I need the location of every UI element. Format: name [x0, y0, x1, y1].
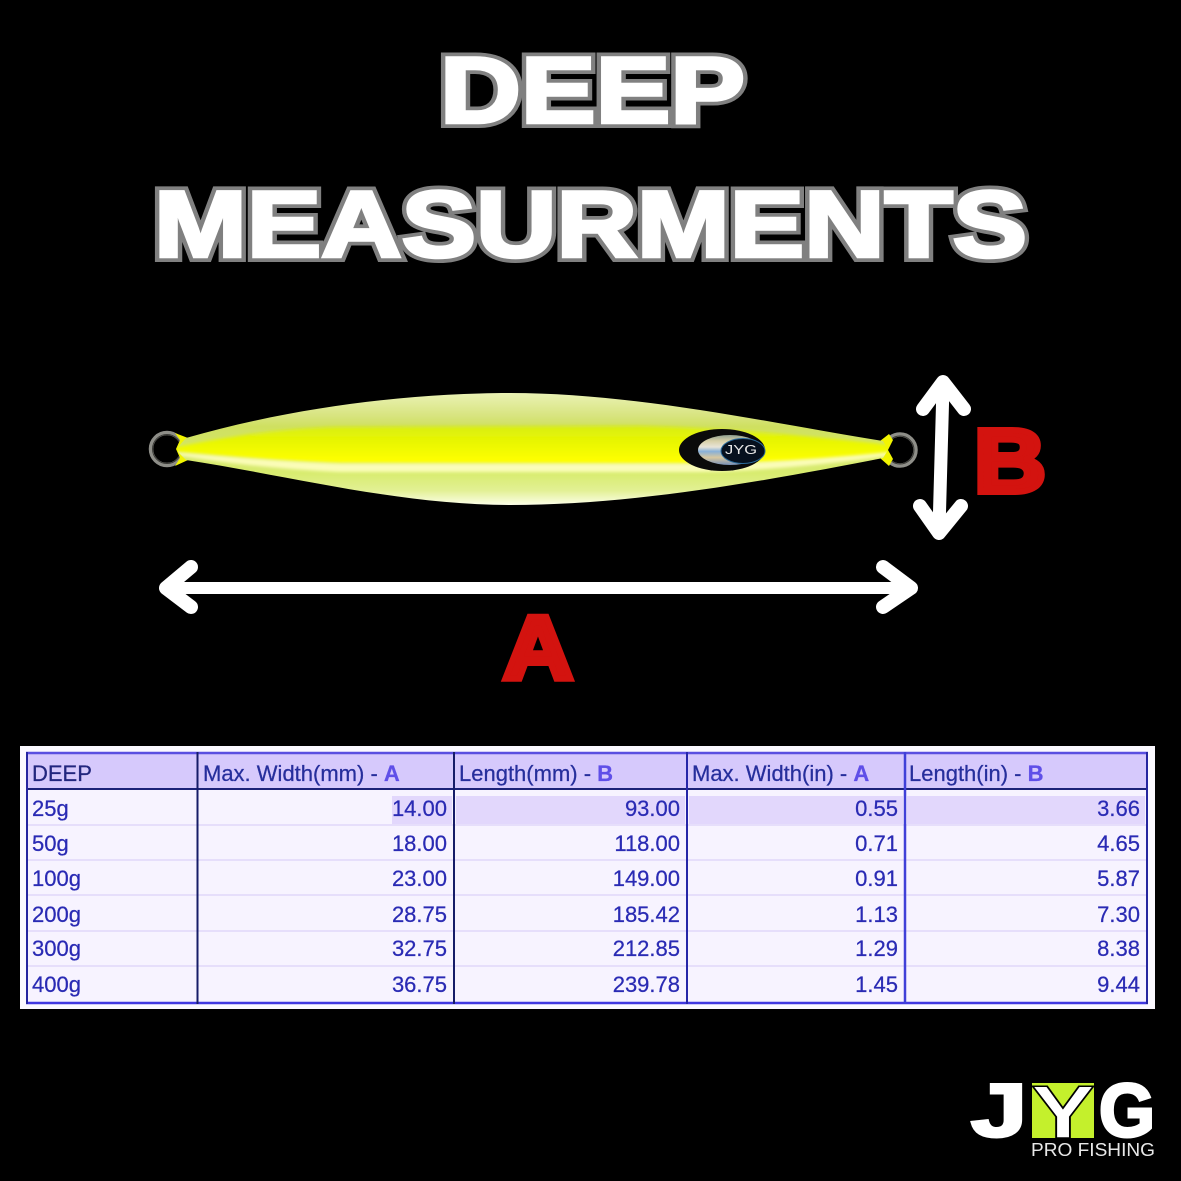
row 25g	[32, 796, 1140, 821]
row 25g: 25g	[32, 796, 69, 821]
row 300g: 1.29	[855, 936, 898, 961]
title line: DEEP: DEEP	[440, 38, 745, 142]
row 100g: 5.87	[1097, 866, 1140, 891]
row 50g: 4.65	[1097, 831, 1140, 856]
row 50g: 0.71	[855, 831, 898, 856]
row 100g: 100g	[32, 866, 81, 891]
table panel background	[20, 746, 1155, 1009]
row 400g	[32, 972, 1140, 997]
row 300g: 32.75	[392, 936, 447, 961]
row 50g	[32, 831, 1140, 856]
row 300g: 212.85	[613, 936, 680, 961]
row 300g: 8.38	[1097, 936, 1140, 961]
row 400g: 9.44	[1097, 972, 1140, 997]
row 200g: 1.13	[855, 902, 898, 927]
row 400g: 400g	[32, 972, 81, 997]
left eyelet	[175, 433, 188, 466]
row 400g: 36.75	[392, 972, 447, 997]
header row: Length(in) - B	[909, 761, 1044, 786]
row 300g: 300g	[32, 936, 81, 961]
title line: DEEP: DEEP	[440, 38, 745, 142]
sticker logo text: JYG	[725, 442, 757, 457]
header row: Max. Width(mm) - A	[203, 761, 400, 786]
header row: Length(mm) - B	[459, 761, 613, 786]
row 200g: 185.42	[613, 902, 680, 927]
row 25g: 0.55	[855, 796, 898, 821]
row 25g: 93.00	[625, 796, 680, 821]
row 50g: 18.00	[392, 831, 447, 856]
row 400g: 239.78	[613, 972, 680, 997]
row 200g: 28.75	[392, 902, 447, 927]
row 50g: 50g	[32, 831, 69, 856]
JYG Pro Fishing logo	[971, 1068, 1155, 1160]
yellow logo square	[1032, 1083, 1094, 1138]
lure body	[178, 393, 888, 505]
row 100g	[32, 866, 1140, 891]
title line: MEASURMENTS: MEASURMENTS	[154, 172, 1027, 276]
row 200g: 200g	[32, 902, 81, 927]
right split ring	[884, 434, 916, 466]
logo wordmark: J	[971, 1068, 1027, 1152]
arrow: vertical dimension B	[920, 382, 964, 533]
holographic eye sticker	[679, 429, 765, 471]
fishing jig lure	[148, 393, 918, 505]
row 300g	[32, 936, 1140, 961]
logo wordmark: Y	[1031, 1070, 1095, 1154]
right eyelet	[880, 434, 893, 466]
arrow: horizontal dimension A	[166, 567, 911, 607]
logo tagline: PRO FISHING	[1031, 1140, 1155, 1160]
row 50g: 118.00	[614, 831, 680, 856]
title line: MEASURMENTS: MEASURMENTS	[154, 172, 1027, 276]
label: A: A	[503, 599, 573, 699]
measurements table	[20, 746, 1155, 1009]
row 25g: 3.66	[1097, 796, 1140, 821]
row 100g: 23.00	[392, 866, 447, 891]
row 25g: 14.00	[392, 796, 447, 821]
first row highlights	[392, 796, 1145, 824]
header row: DEEP	[32, 761, 92, 786]
title	[154, 38, 1027, 276]
table header background	[27, 753, 1147, 789]
row 100g: 0.91	[855, 866, 898, 891]
row 200g: 7.30	[1097, 902, 1140, 927]
header row: Max. Width(in) - A	[692, 761, 869, 786]
logo wordmark	[971, 1068, 1155, 1154]
row 400g: 1.45	[855, 972, 898, 997]
header row	[32, 761, 1044, 786]
logo wordmark: G	[1099, 1068, 1155, 1152]
row 200g	[32, 902, 1140, 927]
label: B: B	[974, 412, 1046, 512]
row 100g: 149.00	[613, 866, 680, 891]
left split ring	[151, 433, 183, 465]
